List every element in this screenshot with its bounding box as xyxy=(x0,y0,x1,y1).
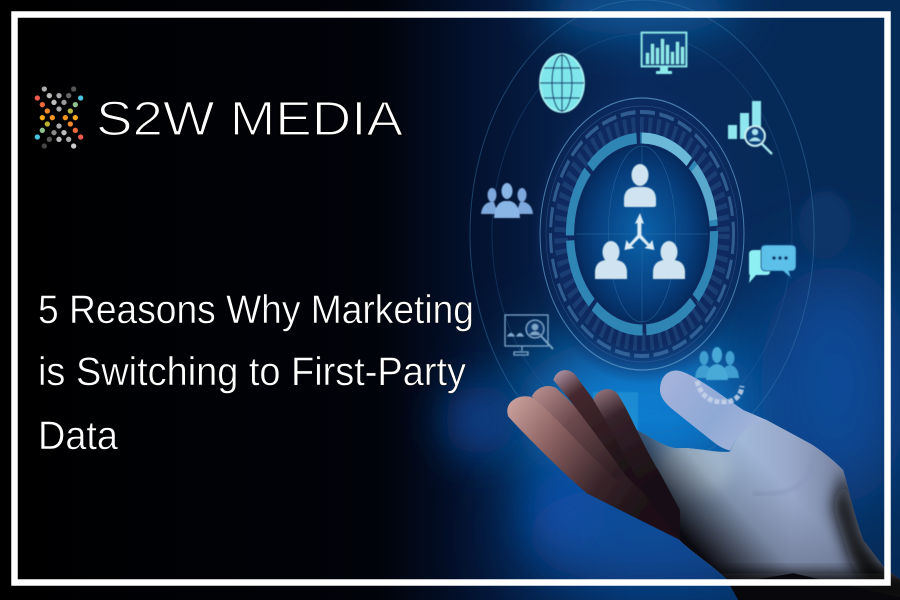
icon: envelope xyxy=(593,392,638,430)
logo: S2W Media xyxy=(35,86,403,149)
icon: monitor with magnifier xyxy=(505,315,553,355)
thumb xyxy=(660,370,767,451)
title: is Switching to First-Party xyxy=(38,350,466,394)
index finger xyxy=(593,389,680,540)
palm and wrist xyxy=(627,413,900,600)
title: 5 Reasons Why Marketing xyxy=(38,288,474,332)
radial interface rings xyxy=(470,0,814,468)
icon: gear on thumb xyxy=(697,381,742,402)
icon: bar chart monitor xyxy=(642,32,686,74)
icon: team group xyxy=(481,183,533,218)
middle finger xyxy=(553,370,657,503)
icon: chat bubbles xyxy=(749,245,796,283)
icon: globe xyxy=(540,54,584,112)
little finger xyxy=(507,396,680,540)
logo wordmark: S2W MEDIA xyxy=(96,93,403,146)
ring finger xyxy=(532,386,630,480)
title xyxy=(38,288,474,458)
logo mark: coloured dot X xyxy=(35,86,83,149)
illustration: open hand xyxy=(507,370,900,600)
icon: analytics magnifier xyxy=(728,101,772,154)
title: Data xyxy=(38,414,119,458)
icon: central people network xyxy=(595,164,685,279)
icon: team and gear xyxy=(695,347,739,380)
